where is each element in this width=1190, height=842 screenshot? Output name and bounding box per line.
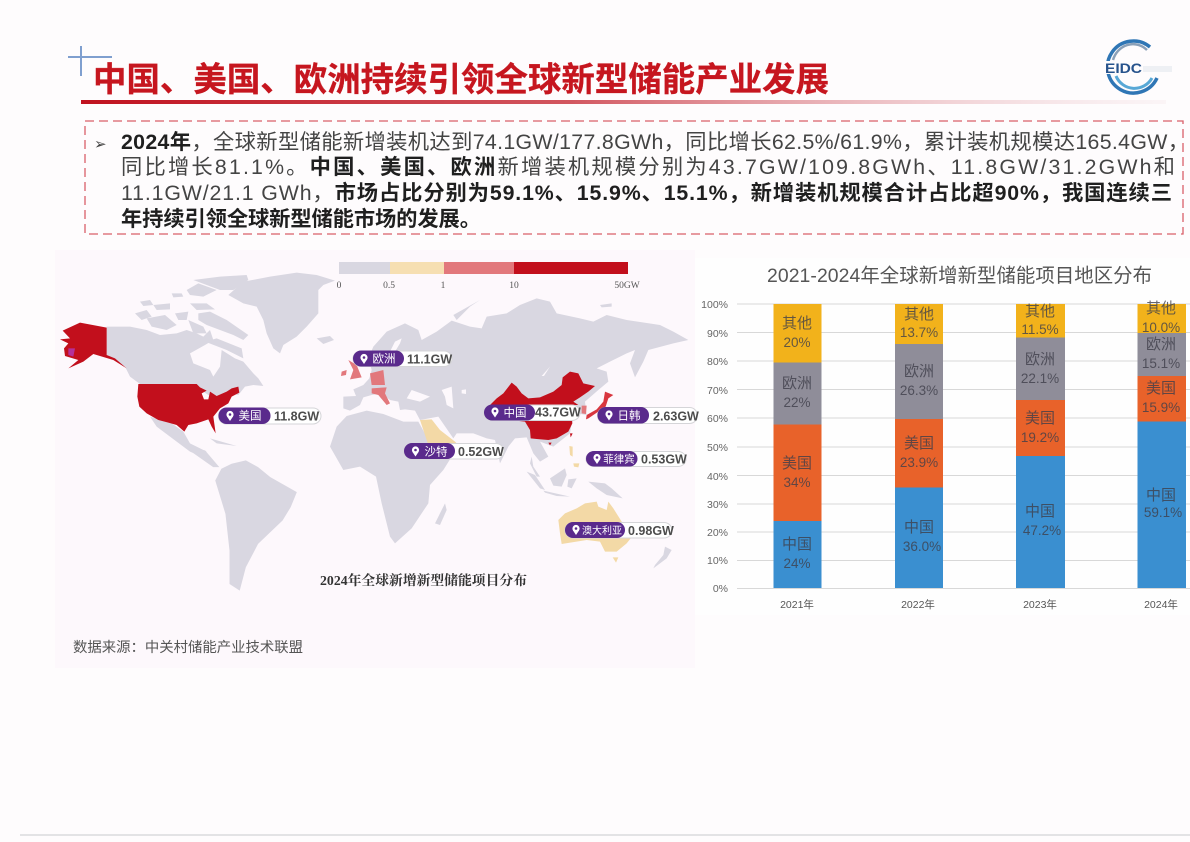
map legend: 0.5	[383, 281, 395, 291]
bar: 2022: 26.3%	[900, 383, 938, 398]
bar: 2024: 中国	[1146, 487, 1176, 504]
bar: 2024: 15.1%	[1142, 356, 1180, 371]
bar: 2021: 20%	[783, 335, 811, 350]
chart gridlines	[737, 304, 1190, 588]
map label: 欧洲: 欧洲	[372, 352, 396, 366]
icon: EIDC logo	[1105, 41, 1172, 93]
map label: 中国: 43.7GW	[535, 406, 581, 420]
map legend: 0	[337, 281, 342, 291]
bar: 2022: 2022年	[901, 598, 935, 611]
bar: 2022: 美国	[904, 435, 934, 452]
bar: 2024: 10.0%	[1142, 320, 1180, 335]
summary callout box	[85, 121, 1189, 234]
map label: 日韩: 2.63GW	[653, 410, 699, 424]
map label: 菲律宾: 菲律宾	[603, 452, 635, 466]
bar: 2023: 11.5%	[1021, 322, 1059, 337]
data source note: 数据来源：中关村储能产业技术联盟	[73, 639, 303, 656]
title: 中国、美国、欧洲持续引领全球新型储能产业发展	[93, 62, 829, 99]
icon: EIDC logo: EIDC	[1105, 60, 1142, 76]
bar: 2021: 美国	[782, 455, 812, 472]
bar: 2021: 其他	[782, 315, 812, 332]
bar: 2023: 欧洲	[1025, 351, 1055, 368]
map legend: 1	[441, 281, 446, 291]
panel: world map	[60, 262, 699, 591]
decorative cross mark	[68, 46, 112, 76]
Japan	[586, 392, 613, 419]
bar: 2023: 22.1%	[1021, 371, 1059, 386]
Alaska	[60, 323, 127, 368]
map label: 菲律宾: 0.53GW	[641, 452, 687, 466]
bar: 2021: 欧洲	[782, 375, 812, 392]
panel: stacked bar chart	[701, 265, 1190, 611]
bar: 2022: 其他	[904, 306, 934, 323]
bar: 2024: 其他	[1146, 300, 1176, 317]
bar: 2023: 其他	[1025, 303, 1055, 320]
bar: 2021: 22%	[783, 395, 811, 410]
United States	[137, 384, 239, 433]
map label: 欧洲: 11.1GW	[407, 352, 452, 366]
map label: 澳大利亚: 澳大利亚	[582, 524, 622, 537]
China	[490, 372, 595, 445]
United Kingdom, Germany, Italy, Korea	[341, 360, 587, 414]
map legend	[337, 262, 640, 291]
map label: 澳大利亚	[565, 522, 674, 538]
Saudi Arabia	[420, 419, 460, 453]
bar: 2024: 欧洲	[1146, 336, 1176, 353]
map: South America	[185, 447, 297, 591]
y axis labels: 10%	[707, 555, 728, 567]
map: United States and Mexico	[60, 323, 239, 460]
bar: 2023: 美国	[1025, 410, 1055, 427]
y axis labels: 100%	[701, 299, 728, 311]
bar: 2023: 中国	[1025, 503, 1055, 520]
bar: 2024: 美国	[1146, 380, 1176, 397]
map label: 美国: 美国	[238, 408, 262, 422]
y axis labels: 90%	[707, 328, 728, 340]
y axis labels: 50%	[707, 442, 728, 454]
summary text: 同比增长81.1%。中国、美国、欧洲新增装机规模分别为43.7GW/109.8GWh、11.8GW/31.2GWh和	[121, 155, 1175, 179]
map: Eurasia, Africa	[330, 298, 688, 543]
map label: 日韩	[598, 407, 699, 424]
map label: 美国: 11.8GW	[274, 410, 319, 424]
bar: 2022: 欧洲	[904, 363, 934, 380]
summary text: 年持续引领全球新型储能市场的发展。	[121, 206, 481, 231]
title underline	[81, 100, 1166, 104]
bar: 2023	[1016, 303, 1065, 611]
chart title: 2021-2024年全球新增新型储能项目地区分布	[767, 265, 1152, 287]
bar: 2023: 47.2%	[1023, 523, 1061, 538]
bar: 2022: 13.7%	[900, 325, 938, 340]
bar: 2024	[1138, 300, 1186, 611]
map legend: 50GW	[614, 281, 640, 291]
Philippines	[569, 446, 579, 467]
map label: 沙特: 沙特	[424, 444, 448, 458]
bar: 2022: 36.0%	[903, 539, 941, 554]
Australia	[558, 502, 633, 563]
bar: 2021	[774, 304, 822, 611]
y axis labels: 0%	[713, 583, 728, 595]
map: Canada and Greenland	[107, 273, 335, 400]
y axis labels: 40%	[707, 471, 728, 483]
y axis labels: 60%	[707, 413, 728, 425]
bar: 2021: 24%	[783, 556, 811, 571]
map: Southeast Asia and Oceania	[527, 446, 672, 568]
map label: 中国	[484, 404, 581, 420]
y axis labels: 30%	[707, 499, 728, 511]
map caption: 2024年全球新增新型储能项目分布	[320, 572, 527, 588]
y axis labels: 70%	[707, 385, 728, 397]
bar: 2023: 2023年	[1023, 598, 1057, 611]
map label: 澳大利亚: 0.98GW	[628, 524, 674, 538]
y axis labels	[701, 299, 728, 595]
map label: 沙特	[404, 443, 504, 459]
y axis labels: 80%	[707, 356, 728, 368]
map legend: 10	[509, 281, 519, 291]
bar: 2022	[895, 304, 943, 611]
bar: 2023: 19.2%	[1021, 430, 1059, 445]
summary text: 11.1GW/21.1 GWh，市场占比分别为59.1%、15.9%、15.1%，新增装机规模合计占比超90%，我国连续三	[121, 180, 1172, 205]
bar: 2024: 2024年	[1144, 598, 1178, 611]
bullet arrow: ➢	[94, 136, 107, 153]
map label: 日韩: 日韩	[618, 408, 641, 422]
map label: 美国	[218, 408, 321, 424]
bar: 2022: 23.9%	[900, 455, 938, 470]
summary text: 2024年，全球新型储能新增装机达到74.1GW/177.8GWh，同比增长62.5%/61.9%，累计装机规模达165.4GW，	[121, 130, 1189, 154]
bar: 2022: 中国	[904, 519, 934, 536]
bar: 2021: 2021年	[780, 598, 814, 611]
map label: 菲律宾	[586, 451, 687, 466]
bar: 2024: 59.1%	[1144, 505, 1182, 520]
map label: 沙特: 0.52GW	[458, 445, 504, 459]
map label: 欧洲	[353, 350, 452, 366]
bar: 2024: 15.9%	[1142, 400, 1180, 415]
map label: 中国: 中国	[504, 406, 526, 420]
bar: 2021: 34%	[783, 475, 811, 490]
y axis labels: 20%	[707, 527, 728, 539]
summary text	[121, 130, 1189, 231]
bar: 2021: 中国	[782, 536, 812, 553]
